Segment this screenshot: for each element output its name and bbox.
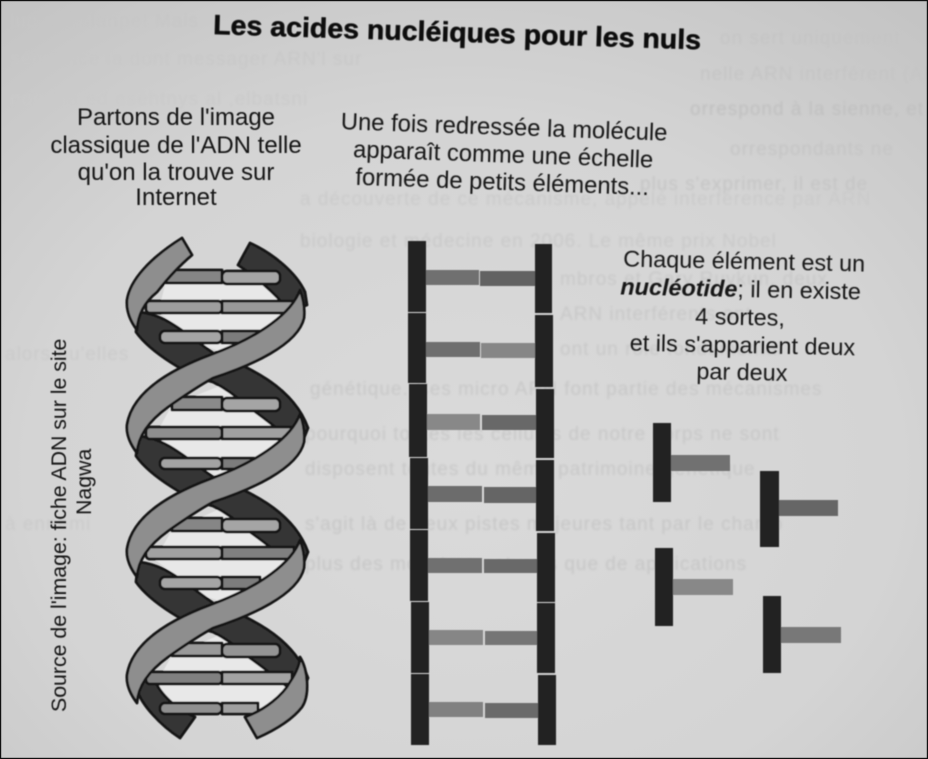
left rail [408,241,429,745]
ladder rungs [426,270,538,718]
text block: nucleotide explanation: Chaque élément est un [623,246,865,277]
DNA double helix [127,238,308,738]
text block: ladder intro: Une fois redressée la molécule [340,108,668,147]
ladder diagram [408,241,556,745]
faint bleed-through text: génétique. Ces micro ARN font partie des mécanismes [310,379,822,400]
text block: ladder intro: formée de petits éléments... [355,164,649,201]
image source credit: Source de l'image: fiche ADN sur le site [47,339,71,712]
text block: ladder intro: apparaît comme une échelle [353,136,654,174]
faint bleed-through text: plus des monstres naturels que de applications [305,554,747,575]
nucleotide: bottom left [655,548,733,626]
faint bleed-through text: pourquoi toutes les cellules de notre corps ne sont [305,424,780,445]
faint bleed-through text: lup not slanpe! Mais [10,11,199,32]
faint bleed-through text: disposent toutes du même patrimoine génétique [305,459,756,480]
image source credit: Nagwa [72,449,96,515]
image source credit [47,339,96,712]
text block: intro image: Partons de l'image [77,104,275,131]
text block: nucleotide explanation: nucléotide; il en existe [620,273,861,305]
text block: nucleotide explanation: 4 sortes, [695,303,785,331]
text block: intro image [50,104,302,211]
title: Les acides nucléiques pour les nuls [213,9,702,55]
right rail [535,244,556,745]
text block: nucleotide explanation: par deux [696,358,788,386]
text block: ladder intro [338,108,668,202]
faint bleed-through text: noqé la ed esèhtnys al ,elbatsni [10,89,308,110]
text block: intro image: Internet [135,184,217,211]
faint bleed-through text [5,11,928,575]
text block: intro image: classique de l'ADN telle [50,132,302,159]
faint bleed-through text: séquence la dont messager ARN'l sur [10,49,362,70]
faint bleed-through text: orrespondants ne [730,139,894,160]
faint bleed-through text: plus s'exprimer, il est de [640,174,868,195]
nucleotide: top right [760,471,838,547]
text block: nucleotide explanation [618,245,865,388]
nucleotide: top left [653,423,730,502]
faint bleed-through text: on sert uniquement [720,28,901,49]
nucleotide: bottom right [763,596,841,673]
text block: nucleotide explanation: et ils s'apparient deux [629,330,856,360]
faint bleed-through text: ont un rôle fondamental [560,339,783,360]
text block: intro image: qu'on la trouve sur [78,159,274,186]
faint bleed-through text: à ennemi [5,514,91,535]
faint bleed-through text: a découverte de ce mécanisme, appelé interférence par ARN [300,189,871,210]
base pairs [146,270,294,714]
dark strands [136,243,308,738]
faint bleed-through text: biologie et médecine en 2006. Le même prix Nobel [300,231,777,252]
helix interior [155,274,294,715]
faint bleed-through text: s'agit là de deux pistes majeures tant par le champ [305,514,783,535]
faint bleed-through text: mbros et Gary Ruvkun, deux [560,269,828,290]
faint bleed-through text: alors qu'elles [5,344,129,365]
faint bleed-through text: ARN interférents ont [560,304,752,325]
light strands [127,238,307,738]
